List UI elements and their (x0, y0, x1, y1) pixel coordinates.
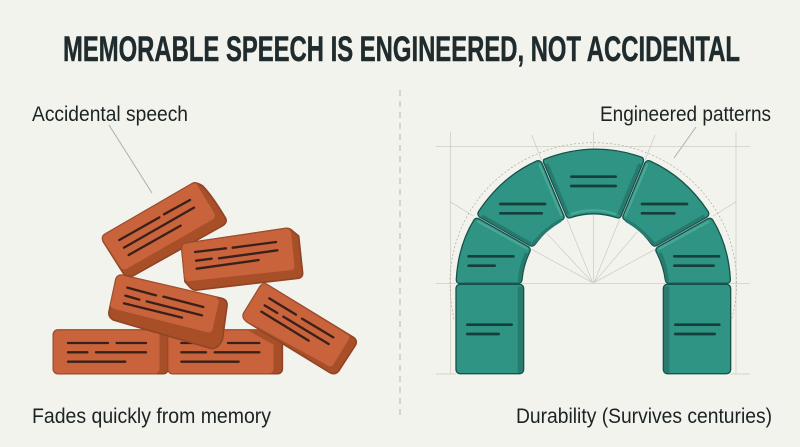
brick: top tilted (103, 183, 226, 276)
construction guides (436, 132, 750, 374)
label: durability: Durability (Survives centuries) (516, 404, 772, 428)
brick: bottom middle (168, 330, 282, 374)
stone: upper right voussoir (623, 161, 709, 246)
label: accidental speech: Accidental speech (32, 102, 188, 126)
stone: lower right voussoir (656, 218, 730, 283)
illustration: pile of bricks (53, 183, 356, 374)
leader line: engineered patterns (674, 127, 696, 158)
stone: lower left voussoir (456, 218, 530, 283)
label: engineered patterns: Engineered patterns (600, 102, 771, 126)
leader line: accidental speech (109, 125, 152, 193)
brick: bottom left (53, 330, 168, 374)
brick: middle tilted (109, 275, 227, 349)
stone: left pillar (456, 284, 524, 374)
stone: right pillar (663, 284, 731, 374)
brick: upper right (182, 228, 303, 290)
stone: upper left voussoir (478, 161, 564, 246)
illustration: engineered arch (436, 132, 750, 374)
brick: right tilted (243, 284, 356, 374)
label: fades quickly: Fades quickly from memory (32, 404, 271, 428)
stone: keystone (543, 149, 643, 218)
